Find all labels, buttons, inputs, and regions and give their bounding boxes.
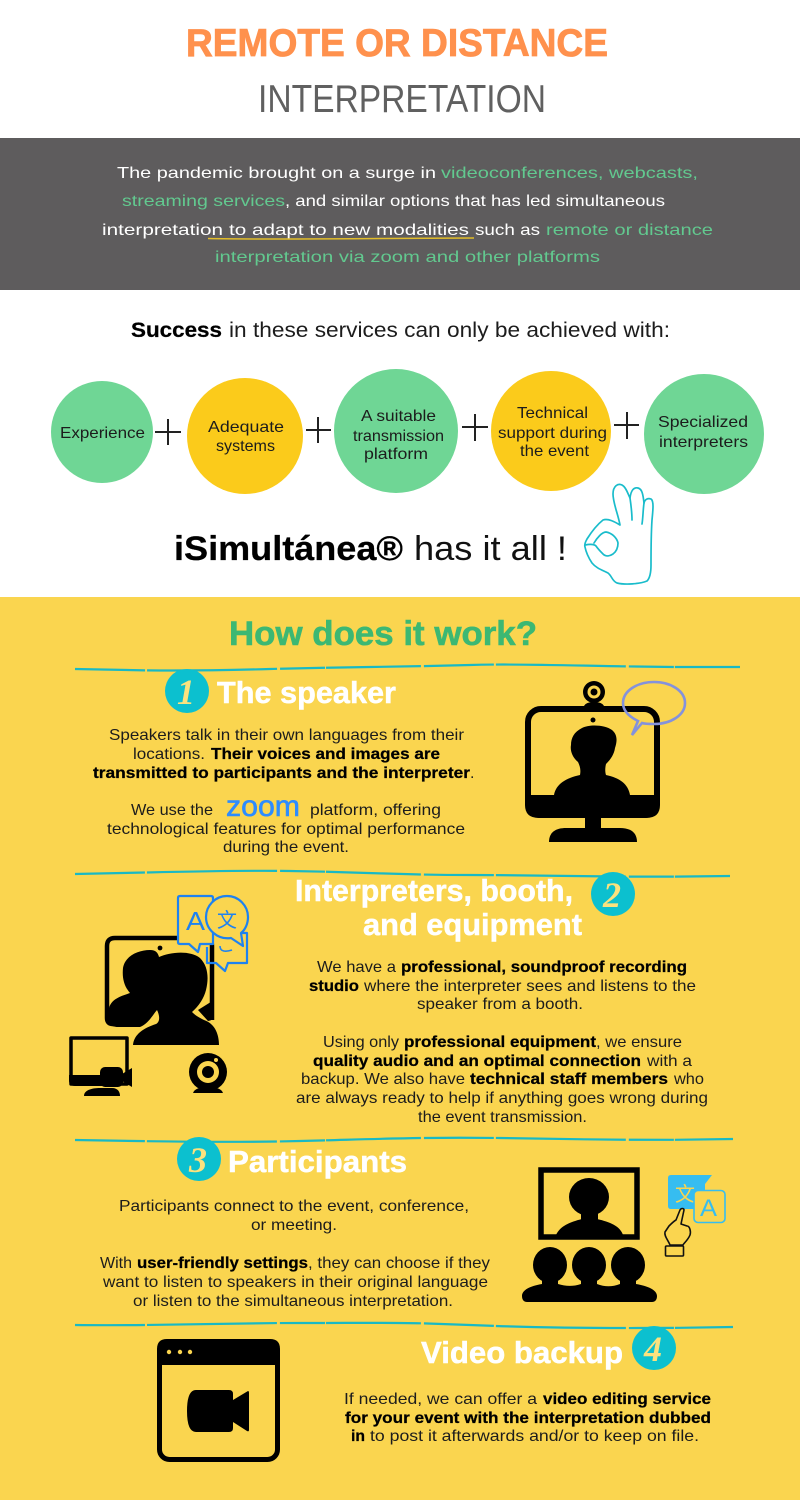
participants description: With (100, 1255, 132, 1272)
tagline: has it all ! (414, 530, 567, 568)
panel: introduction band: to adapt to new modalities (229, 222, 469, 239)
panel: introduction band: interpretation (102, 222, 223, 239)
circle: experience (51, 381, 153, 483)
badge 2: 2 (602, 875, 621, 915)
speaker description: platform, offering (310, 802, 441, 819)
circle: adequate systems: Adequate (208, 419, 284, 436)
speaker description: We use the (131, 802, 213, 819)
badge 1 (165, 669, 209, 713)
badge 3: 3 (188, 1140, 207, 1180)
interpreter description: professional, soundproof recording (401, 959, 687, 976)
section 3: participants (100, 1137, 725, 1310)
heading: video backup: Video backup (421, 1335, 623, 1370)
circle: transmission platform: transmission (353, 428, 444, 445)
icon: speaker on monitor (525, 681, 685, 842)
interpreter description: professional equipment (404, 1034, 597, 1051)
interpreter description: backup. We also have (301, 1071, 465, 1088)
panel: introduction band: The pandemic brought on a surge in (117, 165, 436, 182)
title: REMOTE OR DISTANCE (186, 22, 608, 65)
heading: interpreters: and equipment (363, 907, 582, 942)
interpreter description: where the interpreter sees and listens to the (363, 978, 696, 995)
participants description: , they can choose if they (308, 1255, 490, 1272)
speaker description: locations. (133, 746, 205, 763)
panel: how does it work (0, 597, 800, 1500)
section 4: video backup (157, 1326, 711, 1460)
circle: adequate systems (187, 378, 303, 494)
participants description: want to listen to speakers in their original language (102, 1274, 488, 1291)
speaker description: Their voices and images are (211, 746, 440, 763)
icon: audience watching speaker: 文 (675, 1183, 695, 1206)
panel: introduction band: streaming services (122, 193, 285, 210)
badge 4 (632, 1326, 676, 1370)
interpreter description: studio (309, 978, 359, 995)
section 1: the speaker (93, 669, 685, 856)
icon: ok hand (585, 484, 653, 584)
icon: interpreters with translation bubbles: 文 (217, 909, 237, 932)
panel: introduction band: , and similar options that has led simultaneous (285, 193, 665, 210)
participants description: Participants connect to the event, conference, (119, 1198, 469, 1215)
section 2: interpreters, booth and equipment (69, 872, 708, 1126)
panel: introduction band (0, 138, 800, 290)
badge 1: 1 (177, 672, 195, 712)
tagline (174, 530, 567, 568)
interpreter description: We have a (317, 959, 396, 976)
circle: transmission platform (334, 369, 458, 493)
plus sign (614, 412, 639, 439)
interpreter description: with a (646, 1053, 692, 1070)
circle: specialized interpreters: interpreters (659, 434, 748, 451)
interpreter description: the event transmission. (418, 1109, 587, 1126)
circle: technical support: support during (498, 425, 607, 442)
heading: participants: Participants (228, 1144, 407, 1179)
plus sign (306, 417, 331, 443)
heading: the speaker: The speaker (217, 675, 396, 710)
interpreter description: speaker from a booth. (417, 996, 583, 1013)
badge 2 (591, 872, 635, 916)
icon: audience watching speaker (522, 1170, 725, 1302)
badge 3 (177, 1137, 221, 1181)
panel: introduction band: such as (475, 222, 540, 239)
speaker description: transmitted to participants and the interpreter (93, 765, 470, 782)
heading: interpreters: Interpreters, booth, (295, 873, 573, 908)
circle: technical support: Technical (517, 405, 588, 422)
interpreter description: technical staff members (470, 1071, 668, 1088)
plus sign (462, 414, 488, 441)
heading: how does it work: How does it work? (229, 615, 537, 653)
circle: transmission platform: A suitable (361, 408, 436, 425)
icon: interpreters with translation bubbles (69, 896, 248, 1096)
circle: adequate systems: systems (216, 438, 275, 455)
video description: in (351, 1428, 365, 1445)
speaker description: during the event. (223, 839, 349, 856)
circle: technical support: the event (520, 443, 590, 460)
panel: introduction band: videoconferences, webcasts, (441, 165, 698, 182)
speaker description: Speakers talk in their own languages from their (109, 727, 465, 744)
circle: specialized interpreters: Specialized (658, 414, 748, 431)
heading: interpreters (295, 873, 582, 942)
speaker description: zoom (226, 790, 300, 823)
video description (344, 1391, 711, 1445)
video description: video editing service (543, 1391, 711, 1408)
speaker description: . (470, 765, 474, 782)
video description: to post it afterwards and/or to keep on file. (370, 1428, 699, 1445)
title: INTERPRETATION (258, 78, 546, 121)
plus sign (155, 419, 181, 445)
video description: If needed, we can offer a (344, 1391, 537, 1408)
icon: audience watching speaker: A (700, 1195, 717, 1222)
participants description (100, 1198, 490, 1310)
interpreter description: , we ensure (596, 1034, 682, 1051)
circle: technical support (491, 371, 611, 491)
title (186, 22, 608, 121)
interpreter description (296, 959, 708, 1126)
interpreter description: are always ready to help if anything goes wrong during (296, 1090, 708, 1107)
video description: for your event with the interpretation dubbed (345, 1410, 711, 1427)
speaker description (93, 727, 474, 856)
panel: introduction band: interpretation via zoom and other platforms (215, 249, 600, 266)
icon: interpreters with translation bubbles: A (186, 906, 206, 936)
badge 4: 4 (643, 1329, 662, 1369)
circle: transmission platform: platform (364, 446, 428, 463)
participants description: or meeting. (251, 1217, 337, 1234)
participants description: user-friendly settings (137, 1255, 308, 1272)
circle: experience: Experience (60, 425, 145, 442)
success statement: Success (131, 319, 222, 342)
interpreter description: Using only (323, 1034, 399, 1051)
interpreter description: who (673, 1071, 704, 1088)
tagline: iSimultánea® (174, 530, 403, 568)
interpreter description: quality audio and an optimal connection (313, 1053, 641, 1070)
speaker description: technological features for optimal performance (107, 821, 465, 838)
participants description: or listen to the simultaneous interpretation. (133, 1293, 453, 1310)
panel: introduction band: remote or distance (546, 222, 713, 239)
circle: specialized interpreters (644, 374, 764, 494)
success statement: in these services can only be achieved with: (229, 319, 670, 342)
icon: video window (157, 1339, 280, 1460)
